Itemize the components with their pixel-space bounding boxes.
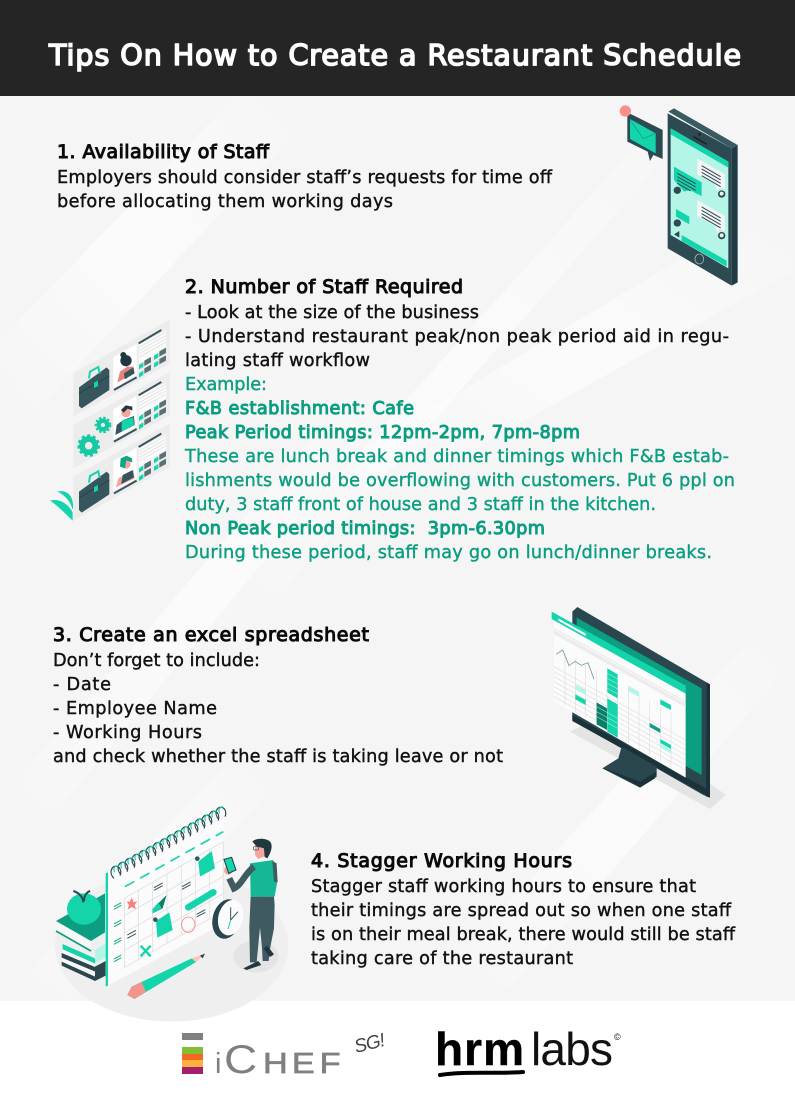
card: staff one — [73, 319, 170, 417]
icon: plant leaves — [50, 491, 73, 521]
example text: Peak Period timings: 12pm-2pm, 7pm-8pm — [185, 423, 580, 443]
body text: Don’t forget to include: — [53, 651, 260, 671]
heading: 1. Availability of Staff — [57, 141, 270, 163]
body text: - Look at the size of the business — [185, 303, 479, 323]
heading: 4. Stagger Working Hours — [311, 850, 572, 872]
section 3: create an excel spreadsheet — [53, 624, 503, 767]
logo: iCHEF SG: C — [224, 1038, 257, 1082]
example text: duty, 3 staff front of house and 3 staff in the kitchen. — [185, 495, 656, 515]
calendar page — [106, 807, 226, 987]
heading: 3. Create an excel spreadsheet — [53, 624, 369, 646]
footer band — [0, 1001, 795, 1100]
body text: Employers should consider staff’s requests for time off — [57, 168, 553, 188]
logo: hrmlabs: labs — [531, 1023, 613, 1075]
example text — [184, 375, 735, 563]
illustration: phone with chat — [620, 105, 738, 286]
logo: iCHEF SG: SG! — [352, 1030, 388, 1058]
example text: These are lunch break and dinner timings which F&B estab- — [184, 447, 729, 467]
card: staff three — [73, 423, 170, 521]
illustration: calendar, books and man — [55, 807, 288, 1022]
example text: During these period, staff may go on lunch/dinner breaks. — [185, 543, 712, 563]
logo: hrmlabs: hrm — [435, 1023, 524, 1075]
section 4: stagger working hours — [311, 850, 736, 969]
card: staff two — [73, 372, 170, 468]
body text: - Working Hours — [53, 723, 202, 743]
illustration: monitor with spreadsheet — [552, 607, 726, 809]
logo: iCHEF SG: i — [215, 1048, 221, 1080]
body text: - Employee Name — [53, 699, 217, 719]
icon: gears — [79, 418, 110, 456]
example text: Non Peak period timings: 3pm-6.30pm — [185, 519, 545, 539]
logo: hrmlabs — [435, 1023, 621, 1075]
title: Tips On How to Create a Restaurant Schedule — [48, 39, 741, 72]
logo: iCHEF SG — [182, 1030, 388, 1082]
example text: lishments would be overflowing with customers. Put 6 ppl on — [185, 471, 735, 491]
logo: iCHEF SG: HEF — [263, 1046, 341, 1079]
section 2: number of staff required — [184, 276, 735, 563]
man with phone — [224, 839, 279, 973]
header band — [0, 0, 795, 96]
body text — [185, 303, 729, 371]
body text — [53, 651, 503, 767]
body text — [57, 168, 553, 212]
body text: - Date — [53, 675, 111, 695]
books with apple — [56, 891, 106, 981]
example text: F&B establishment: Cafe — [185, 399, 414, 419]
heading: 2. Number of Staff Required — [185, 276, 463, 298]
body text: Stagger staff working hours to ensure that — [311, 877, 696, 897]
body text: - Understand restaurant peak/non peak period aid in regu- — [185, 327, 729, 347]
body text: before allocating them working days — [57, 192, 393, 212]
pencil — [127, 954, 205, 999]
illustration: staff profile cards — [50, 319, 170, 521]
clock — [208, 896, 247, 942]
body text: lating staff workflow — [185, 351, 370, 371]
ground shape — [55, 870, 288, 1022]
body text: and check whether the staff is taking leave or not — [53, 747, 503, 767]
body text: is on their meal break, there would still be staff — [311, 925, 736, 945]
section 1: availability of staff — [57, 141, 553, 212]
body text: their timings are spread out so when one staff — [311, 901, 732, 921]
logo: hrmlabs: © — [614, 1032, 621, 1042]
body text: taking care of the restaurant — [311, 949, 573, 969]
body text — [311, 877, 736, 969]
example text: Example: — [185, 375, 267, 395]
